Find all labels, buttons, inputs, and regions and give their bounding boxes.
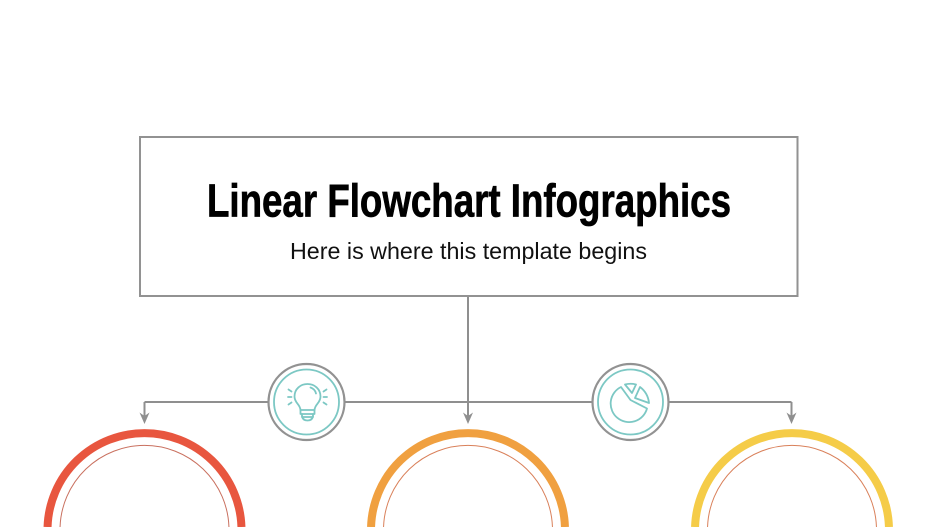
connector lines (144, 296, 792, 417)
circle: red (48, 433, 241, 527)
title panel (140, 137, 798, 296)
heading: Linear Flowchart Infographics (207, 174, 731, 226)
icon badge: light bulb (268, 364, 344, 440)
icon badge: pie chart (592, 364, 668, 440)
subtitle: Here is where this template begins (290, 238, 647, 264)
arrow: right (786, 412, 796, 424)
circle: orange (371, 433, 565, 527)
circle: yellow (695, 433, 889, 527)
icon: light bulb (288, 384, 327, 420)
arrow: center (463, 412, 473, 424)
icon: pie chart (611, 384, 649, 422)
arrow: left (140, 412, 150, 424)
